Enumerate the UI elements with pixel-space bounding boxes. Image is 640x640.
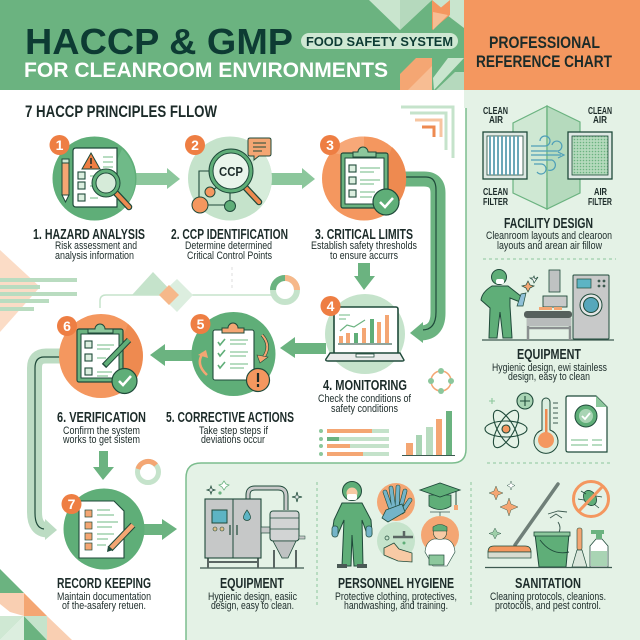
section heading: 7 HACCP PRINCIPLES FLLOW [25,102,218,121]
heading 1: 1. HAZARD ANALYSIS [33,227,145,243]
badge 2: 2 [191,137,199,153]
description 7: Maintain documentation [57,591,151,603]
subtitle: FOR CLEANROOM ENVIRONMENTS [24,59,388,82]
description 5: Take step steps if [199,425,269,437]
label: air filter: FILTER [588,197,613,208]
arrow: 6 to 7 connector [34,356,62,540]
badge 4: 4 [327,298,335,314]
description: sanitation: protocols, and pest control. [495,600,601,612]
description 6 [62,425,140,446]
heading: sanitation: SANITATION [515,576,581,592]
description: personnel hygiene [335,591,457,612]
badge 6: 6 [63,318,71,334]
panel: facility design [483,106,613,252]
icon: no pest sign [574,482,608,516]
icon: hazard analysis [52,136,136,220]
icon: hand brush [572,528,587,567]
heading 4: 4. MONITORING [323,378,407,394]
icon: clipboard with check [322,136,406,220]
heading 5: 5. CORRECTIVE ACTIONS [166,410,294,426]
icon: air filter hexagon [483,106,612,209]
icon: handwashing [377,522,415,562]
label: air filter [588,187,613,208]
description: equipment bottom: Hygienic design, easiic [208,591,297,603]
heading 6: 6. VERIFICATION [57,410,146,426]
description 2: Determine determined [185,240,272,252]
icon: certified document [566,396,607,452]
description 3: to ensure accurrs [330,250,398,262]
badge 1: 1 [56,137,64,153]
icon: spray bottle [590,530,608,567]
step 7: record keeping [57,488,151,612]
description 2 [185,240,272,262]
label: air filter: AIR [594,187,608,198]
description: personnel hygiene: Protective clothing, protectives, [335,591,457,603]
icon: bucket [534,532,570,567]
description 7 [57,591,151,612]
decoration: node ring [428,368,454,394]
icon: clipboard with pencil [59,314,143,398]
panel: equipment bottom [200,481,305,612]
chart: progress bars [319,429,389,456]
description 1 [55,240,137,262]
description 6: Confirm the system [63,425,140,437]
badge 5: 5 [197,316,205,332]
label: clean air right: AIR [593,115,608,126]
arrow: 7 to equipment [140,519,177,540]
arrow: 3 down to 4 [354,263,375,290]
heading: personnel hygiene: PERSONNEL HYGIENE [338,576,454,592]
icon: spray bug sketch [548,511,567,534]
description 2: Critical Control Points [187,250,272,262]
step 4: monitoring [318,294,412,415]
decoration: corner triangles [0,569,72,640]
description: equipment right: design, easy to clean [508,371,590,383]
heading 2: 2. CCP IDENTIFICATION [171,227,288,243]
icon: sparkles [489,481,518,539]
description: sanitation: Cleaning protocols, cleanions. [490,591,606,603]
description: sanitation [490,591,606,612]
description: equipment bottom: design, easy to clean. [211,600,294,612]
description: facility design [486,230,612,252]
label: clean air left [483,106,508,126]
description 1: Risk assessment and [55,240,137,252]
description 7: of the-asafery retuen. [62,600,146,612]
description: equipment right [492,362,607,383]
chart: rising bars [402,411,455,456]
icon: ccp magnifier: CCP [219,164,243,179]
heading: equipment right: EQUIPMENT [517,347,581,363]
step 1: hazard analysis [33,135,145,262]
heading 7: RECORD KEEPING [57,576,151,592]
panel: professional reference chart: PROFESSIONAL [489,34,600,52]
description 4: Check the conditions of [318,393,412,405]
icon: graduation cap [420,483,460,516]
description 1: analysis information [55,250,134,262]
title: HACCP & GMP [25,21,293,62]
description 3: Establish safety thresholds [311,240,417,252]
description: facility design: layouts and arean air fillow [497,240,602,252]
description: facility design: Cleanroom layouts and clearoon [486,230,612,242]
icon: atom [485,393,533,451]
heading: facility design: FACILITY DESIGN [504,216,593,232]
label: clean filter: FILTER [483,197,509,208]
icon: gloves [377,483,415,522]
icon: corrective checklist [192,312,276,396]
description 4 [318,393,412,415]
description: equipment bottom [208,591,297,612]
step 2: ccp identification [171,135,288,262]
decoration: small ring [138,461,158,482]
description: personnel hygiene: handwashing, and training. [344,600,448,612]
arrow: 6 down to 7 [93,451,114,480]
decoration: connector with diamonds and ring [100,267,297,312]
arrow: 4 to 5 [280,337,326,358]
description 5: deviations occur [201,434,265,446]
arrow: 2 to 3 [271,168,315,189]
header banner [0,0,464,90]
panel: pale background [186,90,640,640]
description 4: safety conditions [331,403,398,415]
heading: equipment bottom: EQUIPMENT [220,576,284,592]
label: clean filter [483,187,509,208]
arrow: 1 to 2 [136,168,180,189]
label: clean filter: CLEAN [483,187,508,198]
icon: protective suit [332,482,372,568]
badge 7: 7 [68,496,76,512]
heading 3: 3. CRITICAL LIMITS [315,227,413,243]
description 3 [311,240,417,262]
panel: professional reference chart: REFERENCE CHART [476,53,612,71]
arrow: 3 to 4 connector [404,177,438,343]
icon: record document and pencil [64,488,144,570]
icon: process tank [200,481,305,568]
label: clean air right [588,106,612,126]
badge 3: 3 [326,137,334,153]
panel: sanitation [485,481,612,612]
decoration: left peach diamond and stripes [0,250,77,332]
pill: food safety system: FOOD SAFETY SYSTEM [306,34,453,49]
label: clean air left: CLEAN [483,106,508,117]
step 5: corrective actions [166,312,294,446]
step 6: verification [57,314,146,446]
label: clean air right: CLEAN [588,106,612,117]
arrow: 5 to 6 [150,344,194,366]
icon: thermometer [534,398,558,453]
step 3: critical limits [311,135,417,262]
icon: worker and machines [481,270,614,340]
icon: trained person [421,516,459,566]
decoration: nested corner lines [401,107,453,158]
panel: personnel hygiene [332,482,460,612]
description 5 [199,425,269,446]
description: equipment right: Hygienic design, ewi stainless [492,362,607,374]
label: clean air left: AIR [489,115,504,126]
icon: mop [488,484,558,558]
description 6: works to get sistem [62,434,140,446]
panel: equipment right [481,270,614,453]
icon: laptop chart [325,294,405,374]
panel: professional reference chart [464,0,640,90]
